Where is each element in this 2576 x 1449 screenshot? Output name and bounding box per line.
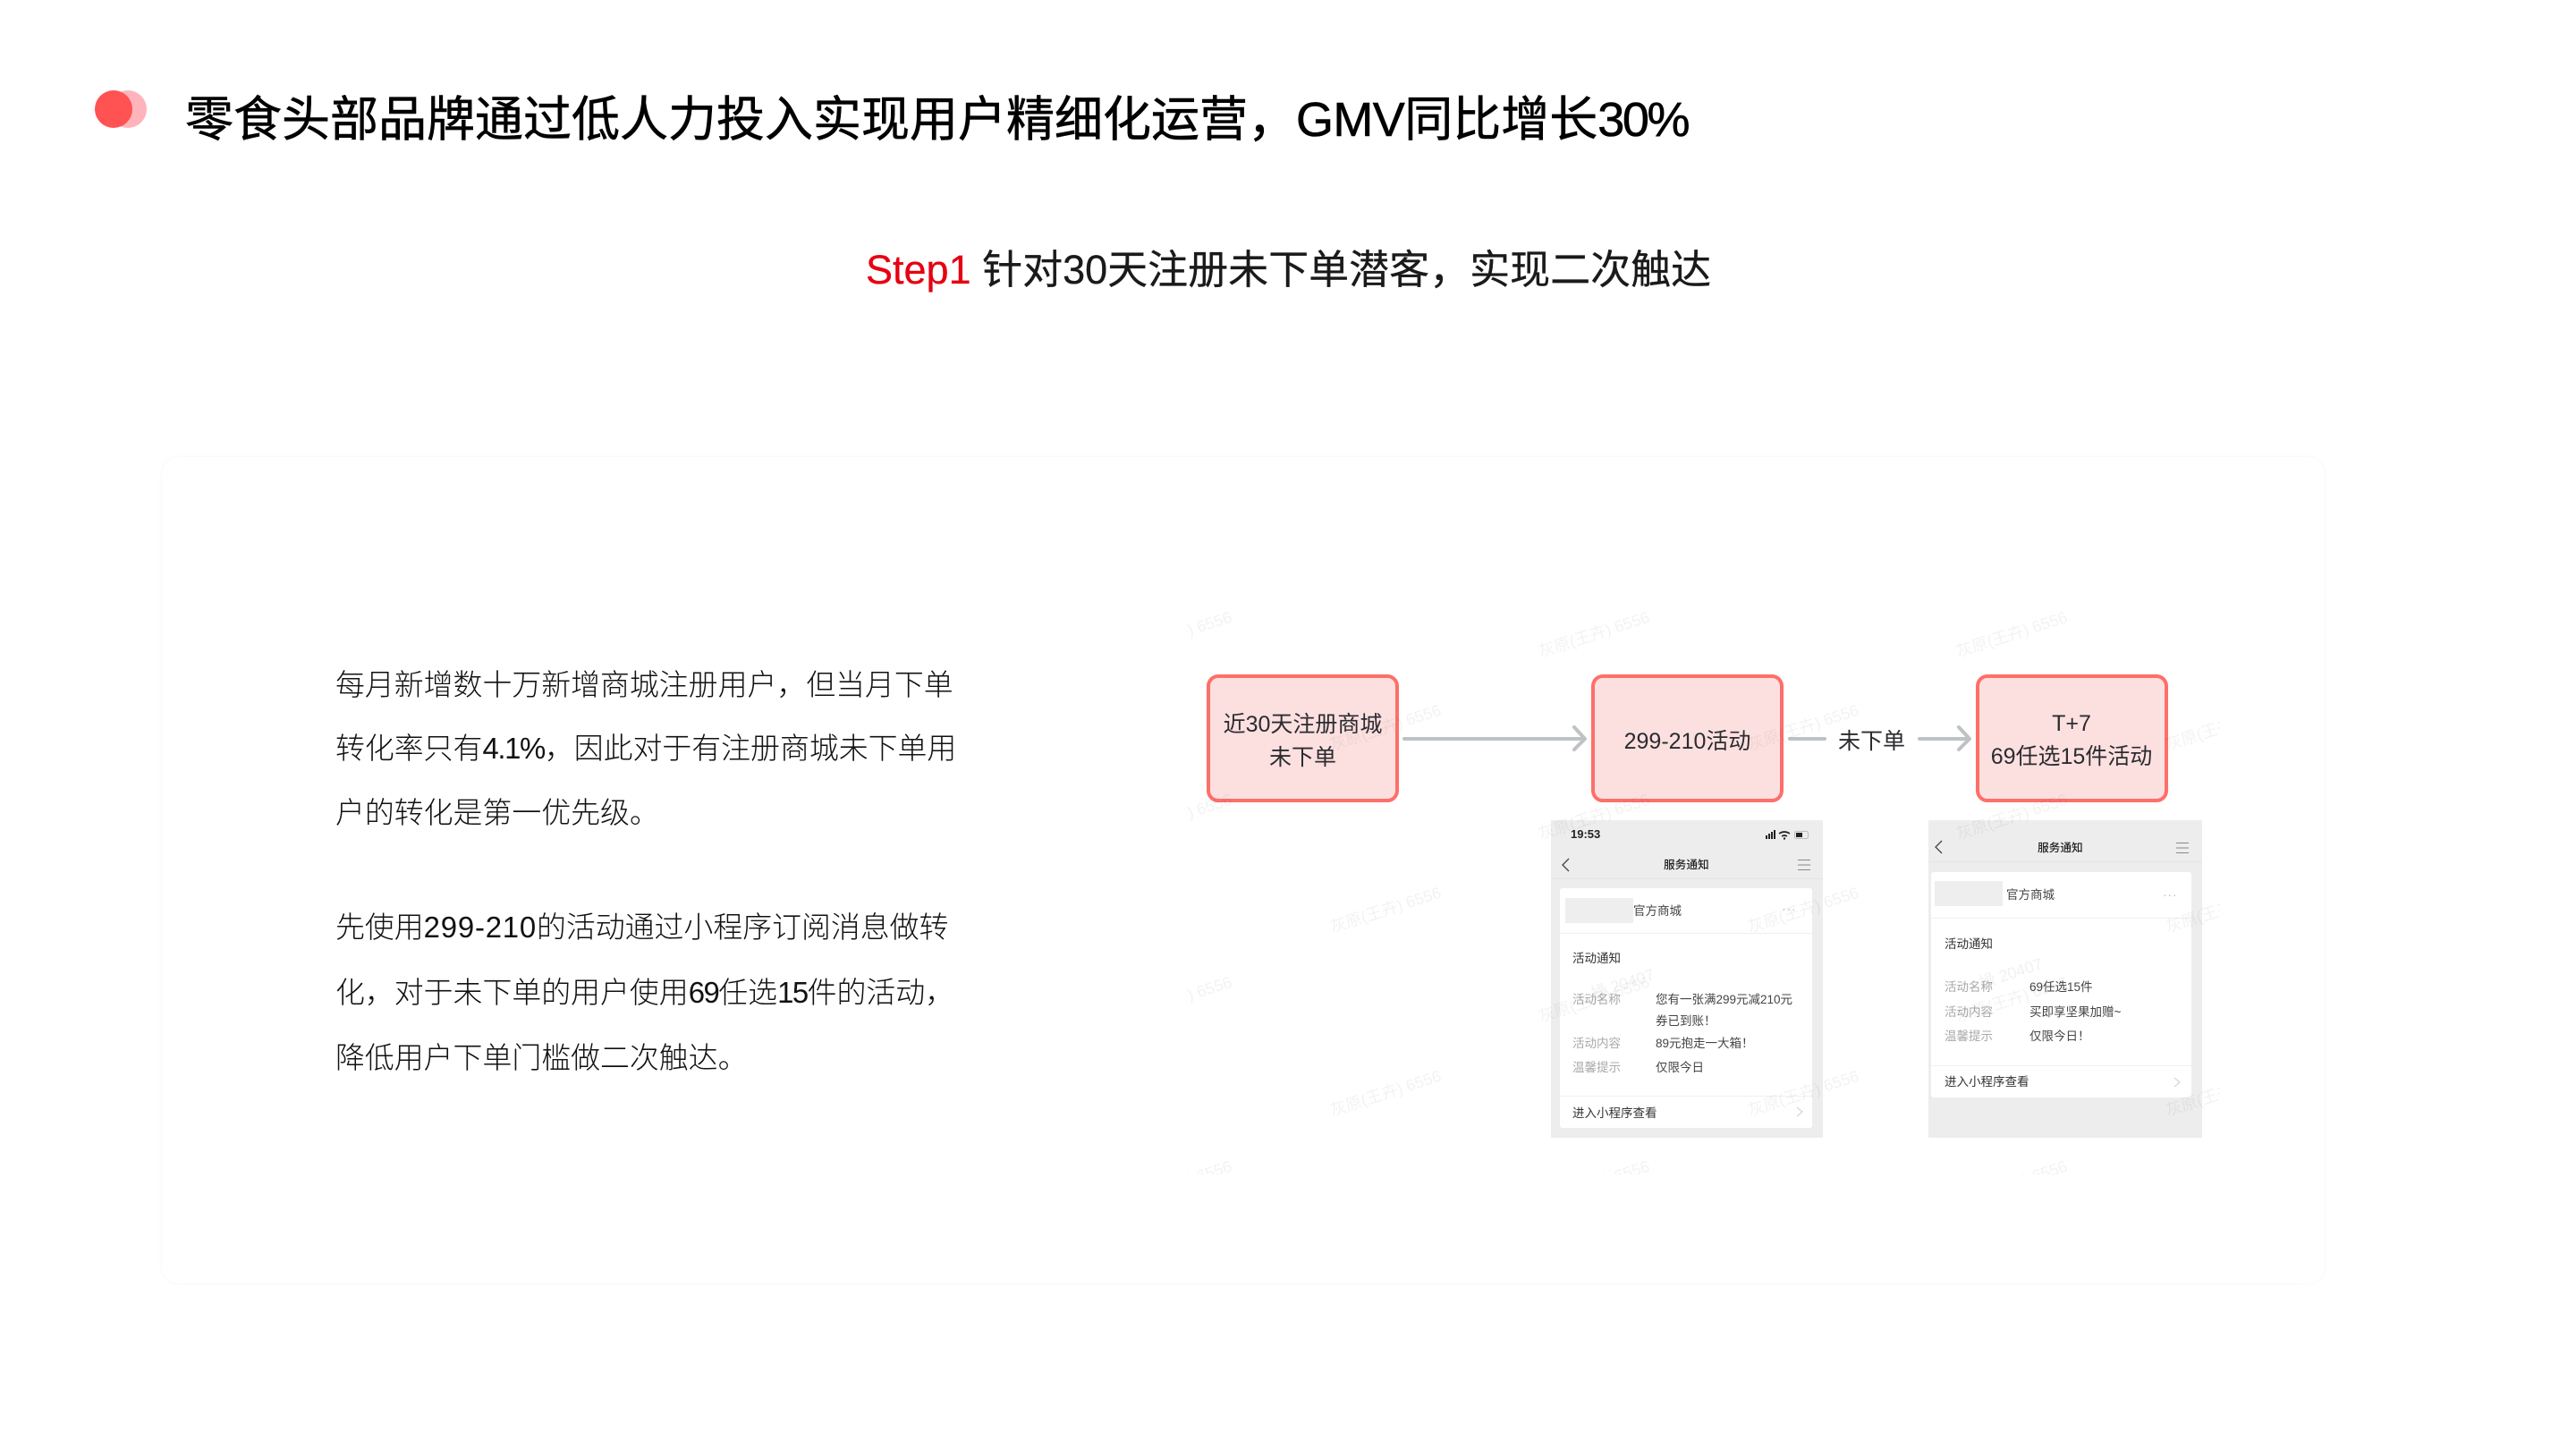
phone screenshot: 299-210 notification: 券已到账！ — [1656, 1014, 1716, 1028]
phone screenshot: 69 pick 15 notification: 温馨提示 — [1945, 1030, 1993, 1043]
phone screenshot: 69 pick 15 notification — [1928, 820, 2202, 1138]
phone screenshot: 299-210 notification: 官方商城 — [1633, 904, 1682, 918]
flow box: T+7 offer: T+7 — [2052, 711, 2091, 736]
title: 零食头部品牌通过低人力投入实现用户精细化运营，GMV同比增长30% — [185, 93, 1688, 147]
phone screenshot: 299-210 notification: ··· — [1782, 902, 1796, 916]
watermark overlay: 灰原(王卉) 6556 — [2164, 701, 2279, 754]
text block: description: 降低用户下单门槛做二次触达。 — [335, 1041, 747, 1074]
phone screenshot: 69 pick 15 notification: ··· — [2163, 888, 2177, 902]
phone screenshot: 299-210 notification: 您有一张满299元减210元 — [1656, 993, 1792, 1006]
watermark overlay: 灰原(王卉) 6556 — [1746, 1067, 1861, 1120]
watermark overlay: 灰原(王卉) 6556 — [2164, 884, 2279, 936]
watermark overlay: 灰原(王卉) 6556 — [1119, 608, 1234, 661]
flow box: 299-210 campaign: 299-210活动 — [1624, 729, 1750, 754]
watermark overlay: 灰原(王卉) 6556 — [1746, 701, 1861, 754]
watermark overlay: 灰原(王卉) 6556 — [1954, 1157, 2070, 1210]
phone screenshot: 299-210 notification: 活动通知 — [1572, 952, 1621, 965]
flow box: 299-210 campaign — [1591, 674, 1784, 802]
watermark overlay: 灰原(王卉) 6556 — [1537, 1157, 1652, 1210]
text block: description: 化，对于未下单的用户使用69任选15件的活动， — [335, 976, 954, 1009]
phone screenshot: 299-210 notification: 89元抱走一大箱！ — [1656, 1037, 1754, 1050]
watermark overlay: 灰原(王卉) 6556 — [1537, 791, 1652, 843]
watermark overlay: 灰原(王卉) 6556 — [2164, 1067, 2279, 1120]
subheading: step 1: Step1 针对30天注册未下单潜客，实现二次触达 — [866, 247, 1711, 292]
flow box: T+7 offer: 69任选15件活动 — [1991, 744, 2152, 769]
arrow label: 未下单 — [1838, 729, 1905, 754]
phone screenshot: 299-210 notification: 进入小程序查看 — [1572, 1106, 1657, 1120]
flow box: T+7 offer — [1975, 674, 2168, 802]
watermark overlay: 灰原(王卉) 6556 — [1954, 791, 2070, 843]
text block: description: 转化率只有4.1%，因此对于有注册商城未下单用 — [335, 732, 956, 765]
phone screenshot: 69 pick 15 notification: 活动通知 — [1945, 937, 1993, 951]
watermark overlay: 灰原(王卉) 6556 — [1537, 973, 1652, 1026]
flow box: registered without order: 未下单 — [1269, 745, 1336, 770]
phone screenshot: 69 pick 15 notification: 活动名称 — [1945, 980, 1993, 994]
text block: description — [335, 668, 956, 1074]
text block: description: 先使用299-210的活动通过小程序订阅消息做转 — [335, 911, 948, 944]
watermark overlay: 灰原(王卉) 6556 — [1328, 701, 1444, 754]
phone screenshot: 299-210 notification — [1551, 820, 1823, 1138]
phone screenshot: 299-210 notification: 服务通知 — [1664, 859, 1709, 871]
phone screenshot: 69 pick 15 notification: 官方商城 — [2006, 888, 2055, 902]
watermark overlay: 灰原(王卉) 6556 — [1746, 884, 1861, 936]
watermark overlay: 灰原(王卉) 6556 — [1119, 973, 1234, 1026]
watermark overlay: 灰原(王卉) 6556 — [1119, 1157, 1234, 1210]
panel: case card — [161, 456, 2326, 1284]
phone screenshot: 69 pick 15 notification: 仅限今日！ — [2029, 1030, 2089, 1043]
phone screenshot: 299-210 notification: 19:53 — [1571, 827, 1600, 841]
watermark overlay: 操 20407 — [1977, 954, 2045, 992]
watermark overlay: 灰原(王卉) 6556 — [1954, 608, 2070, 661]
phone screenshot: 69 pick 15 notification: 买即享坚果加赠~ — [2029, 1005, 2121, 1019]
arrow: label to box 3 — [1918, 724, 1971, 751]
watermark overlay: 灰原(王卉) 6556 — [1328, 1067, 1444, 1120]
watermark overlay: 操 20407 — [1589, 965, 1657, 1003]
bullet icon — [95, 90, 147, 128]
phone screenshot: 299-210 notification: 活动名称 — [1572, 993, 1621, 1006]
phone screenshot: 299-210 notification: 仅限今日 — [1656, 1061, 1704, 1074]
phone screenshot: 69 pick 15 notification: 69任选15件 — [2029, 980, 2093, 994]
arrow: box 1 to box 2 — [1402, 724, 1587, 751]
arrow segment: box 2 to label — [1788, 737, 1826, 741]
phone screenshot: 69 pick 15 notification: 服务通知 — [2038, 842, 2083, 854]
phone screenshot: 299-210 notification: 活动内容 — [1572, 1037, 1621, 1050]
watermark overlay: 灰原(王卉) 6556 — [1328, 884, 1444, 936]
phone screenshot: 299-210 notification: 温馨提示 — [1572, 1061, 1621, 1074]
flow box: registered without order: 近30天注册商城 — [1224, 712, 1382, 737]
phone screenshot: 69 pick 15 notification: 活动内容 — [1945, 1005, 1993, 1019]
watermark overlay — [1186, 612, 2220, 1174]
phone screenshot: 69 pick 15 notification: 进入小程序查看 — [1945, 1075, 2029, 1089]
flow box: registered without order — [1207, 674, 1399, 802]
text block: description: 户的转化是第一优先级。 — [335, 796, 659, 829]
watermark overlay: 灰原(王卉) 6556 — [1119, 791, 1234, 843]
watermark overlay: 灰原(王卉) 6556 — [1537, 608, 1652, 661]
watermark overlay: 灰原(王卉) 6556 — [1954, 973, 2070, 1026]
text block: description: 每月新增数十万新增商城注册用户，但当月下单 — [335, 668, 953, 701]
